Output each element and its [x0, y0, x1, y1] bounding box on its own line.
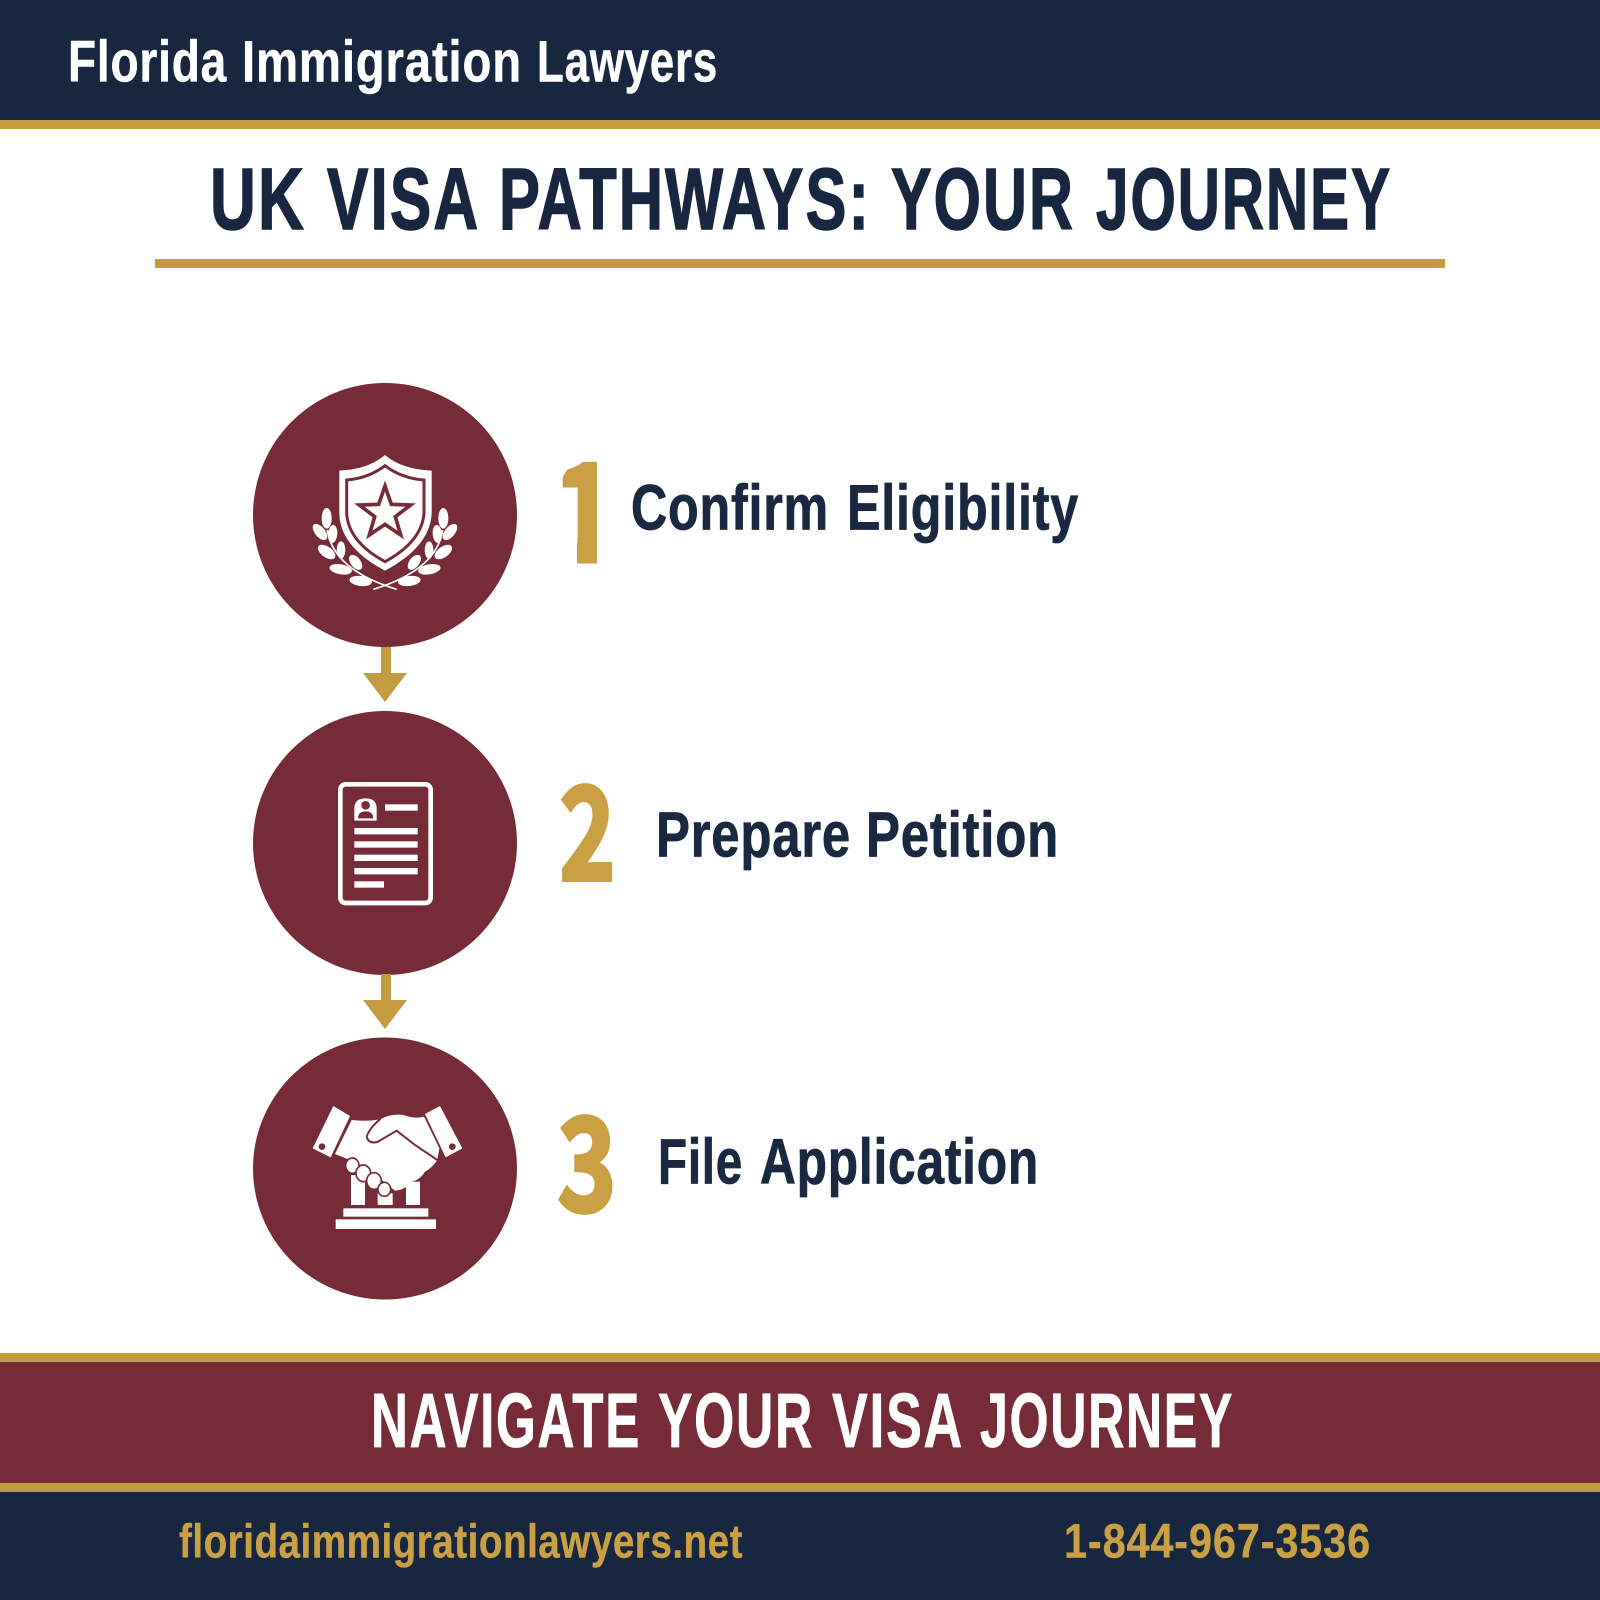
- title: [155, 151, 1445, 268]
- label: Prepare Petition: Prepare: [656, 798, 851, 870]
- website: floridaimmigrationlawyers.net: [179, 1514, 743, 1568]
- icon: handshake over columns: [313, 1106, 462, 1229]
- number 3: 3: [558, 1062, 616, 1249]
- label: Prepare Petition: Petition: [866, 798, 1059, 870]
- label: File Application: File: [658, 1126, 743, 1198]
- label: Confirm Eligibility: Eligibility: [847, 472, 1079, 544]
- phone number: 1-844-967-3536: [1064, 1516, 1371, 1568]
- step 1: [253, 383, 1079, 647]
- title: VISA: [327, 151, 478, 248]
- title: UK: [210, 151, 306, 248]
- firm name: Florida: [68, 30, 227, 94]
- icon: document with photo: [340, 784, 431, 903]
- footer bar: [0, 1492, 1600, 1600]
- step 3: [253, 1038, 1039, 1300]
- arrow 2: [363, 974, 407, 1029]
- banner text: JOURNEY: [980, 1378, 1234, 1464]
- label: File Application: Application: [760, 1126, 1039, 1198]
- banner text: VISA: [832, 1378, 962, 1464]
- label: Confirm Eligibility: Confirm: [631, 472, 829, 544]
- step 2: [253, 711, 1059, 975]
- banner text: NAVIGATE: [371, 1378, 641, 1464]
- number 1: 1: [553, 406, 618, 600]
- number 2: 2: [560, 731, 616, 918]
- title: JOURNEY: [1096, 151, 1392, 248]
- circle 1: [253, 383, 517, 647]
- firm name: Immigration: [242, 30, 522, 94]
- circle 2: [253, 711, 517, 975]
- firm name: Lawyers: [537, 30, 718, 94]
- arrow 1: [363, 647, 407, 702]
- icon: shield with laurel: [310, 455, 460, 589]
- call-to-action banner: [0, 1353, 1600, 1492]
- title: YOUR: [891, 151, 1075, 248]
- circle 3: [253, 1038, 517, 1300]
- header bar: [0, 0, 1600, 129]
- banner text: YOUR: [658, 1378, 814, 1464]
- title: PATHWAYS:: [499, 151, 871, 248]
